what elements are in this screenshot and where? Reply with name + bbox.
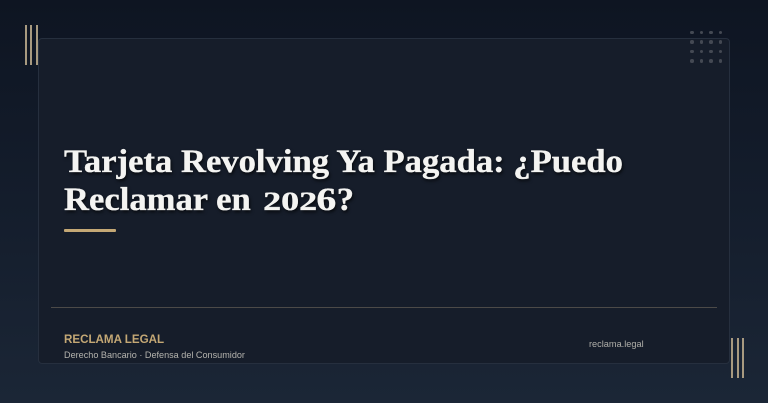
title	[64, 144, 624, 218]
title: Tarjeta Revolving Ya Pagada: ¿Puedo	[64, 144, 623, 180]
brand tagline: Derecho Bancario · Defensa del Consumidor	[64, 350, 245, 360]
footer divider	[51, 307, 717, 308]
decoration: top-right dot grid	[690, 31, 722, 63]
website url: reclama.legal	[589, 339, 644, 349]
decoration: bottom-right gold bars	[731, 338, 744, 378]
title: 202	[263, 187, 317, 216]
brand name: RECLAMA LEGAL	[64, 333, 164, 346]
title: 6	[317, 182, 337, 218]
decoration: top-left gold bars	[25, 25, 38, 65]
panel: central card	[38, 38, 730, 364]
title accent rule	[64, 229, 116, 232]
title: Reclamar en ?	[64, 182, 354, 218]
